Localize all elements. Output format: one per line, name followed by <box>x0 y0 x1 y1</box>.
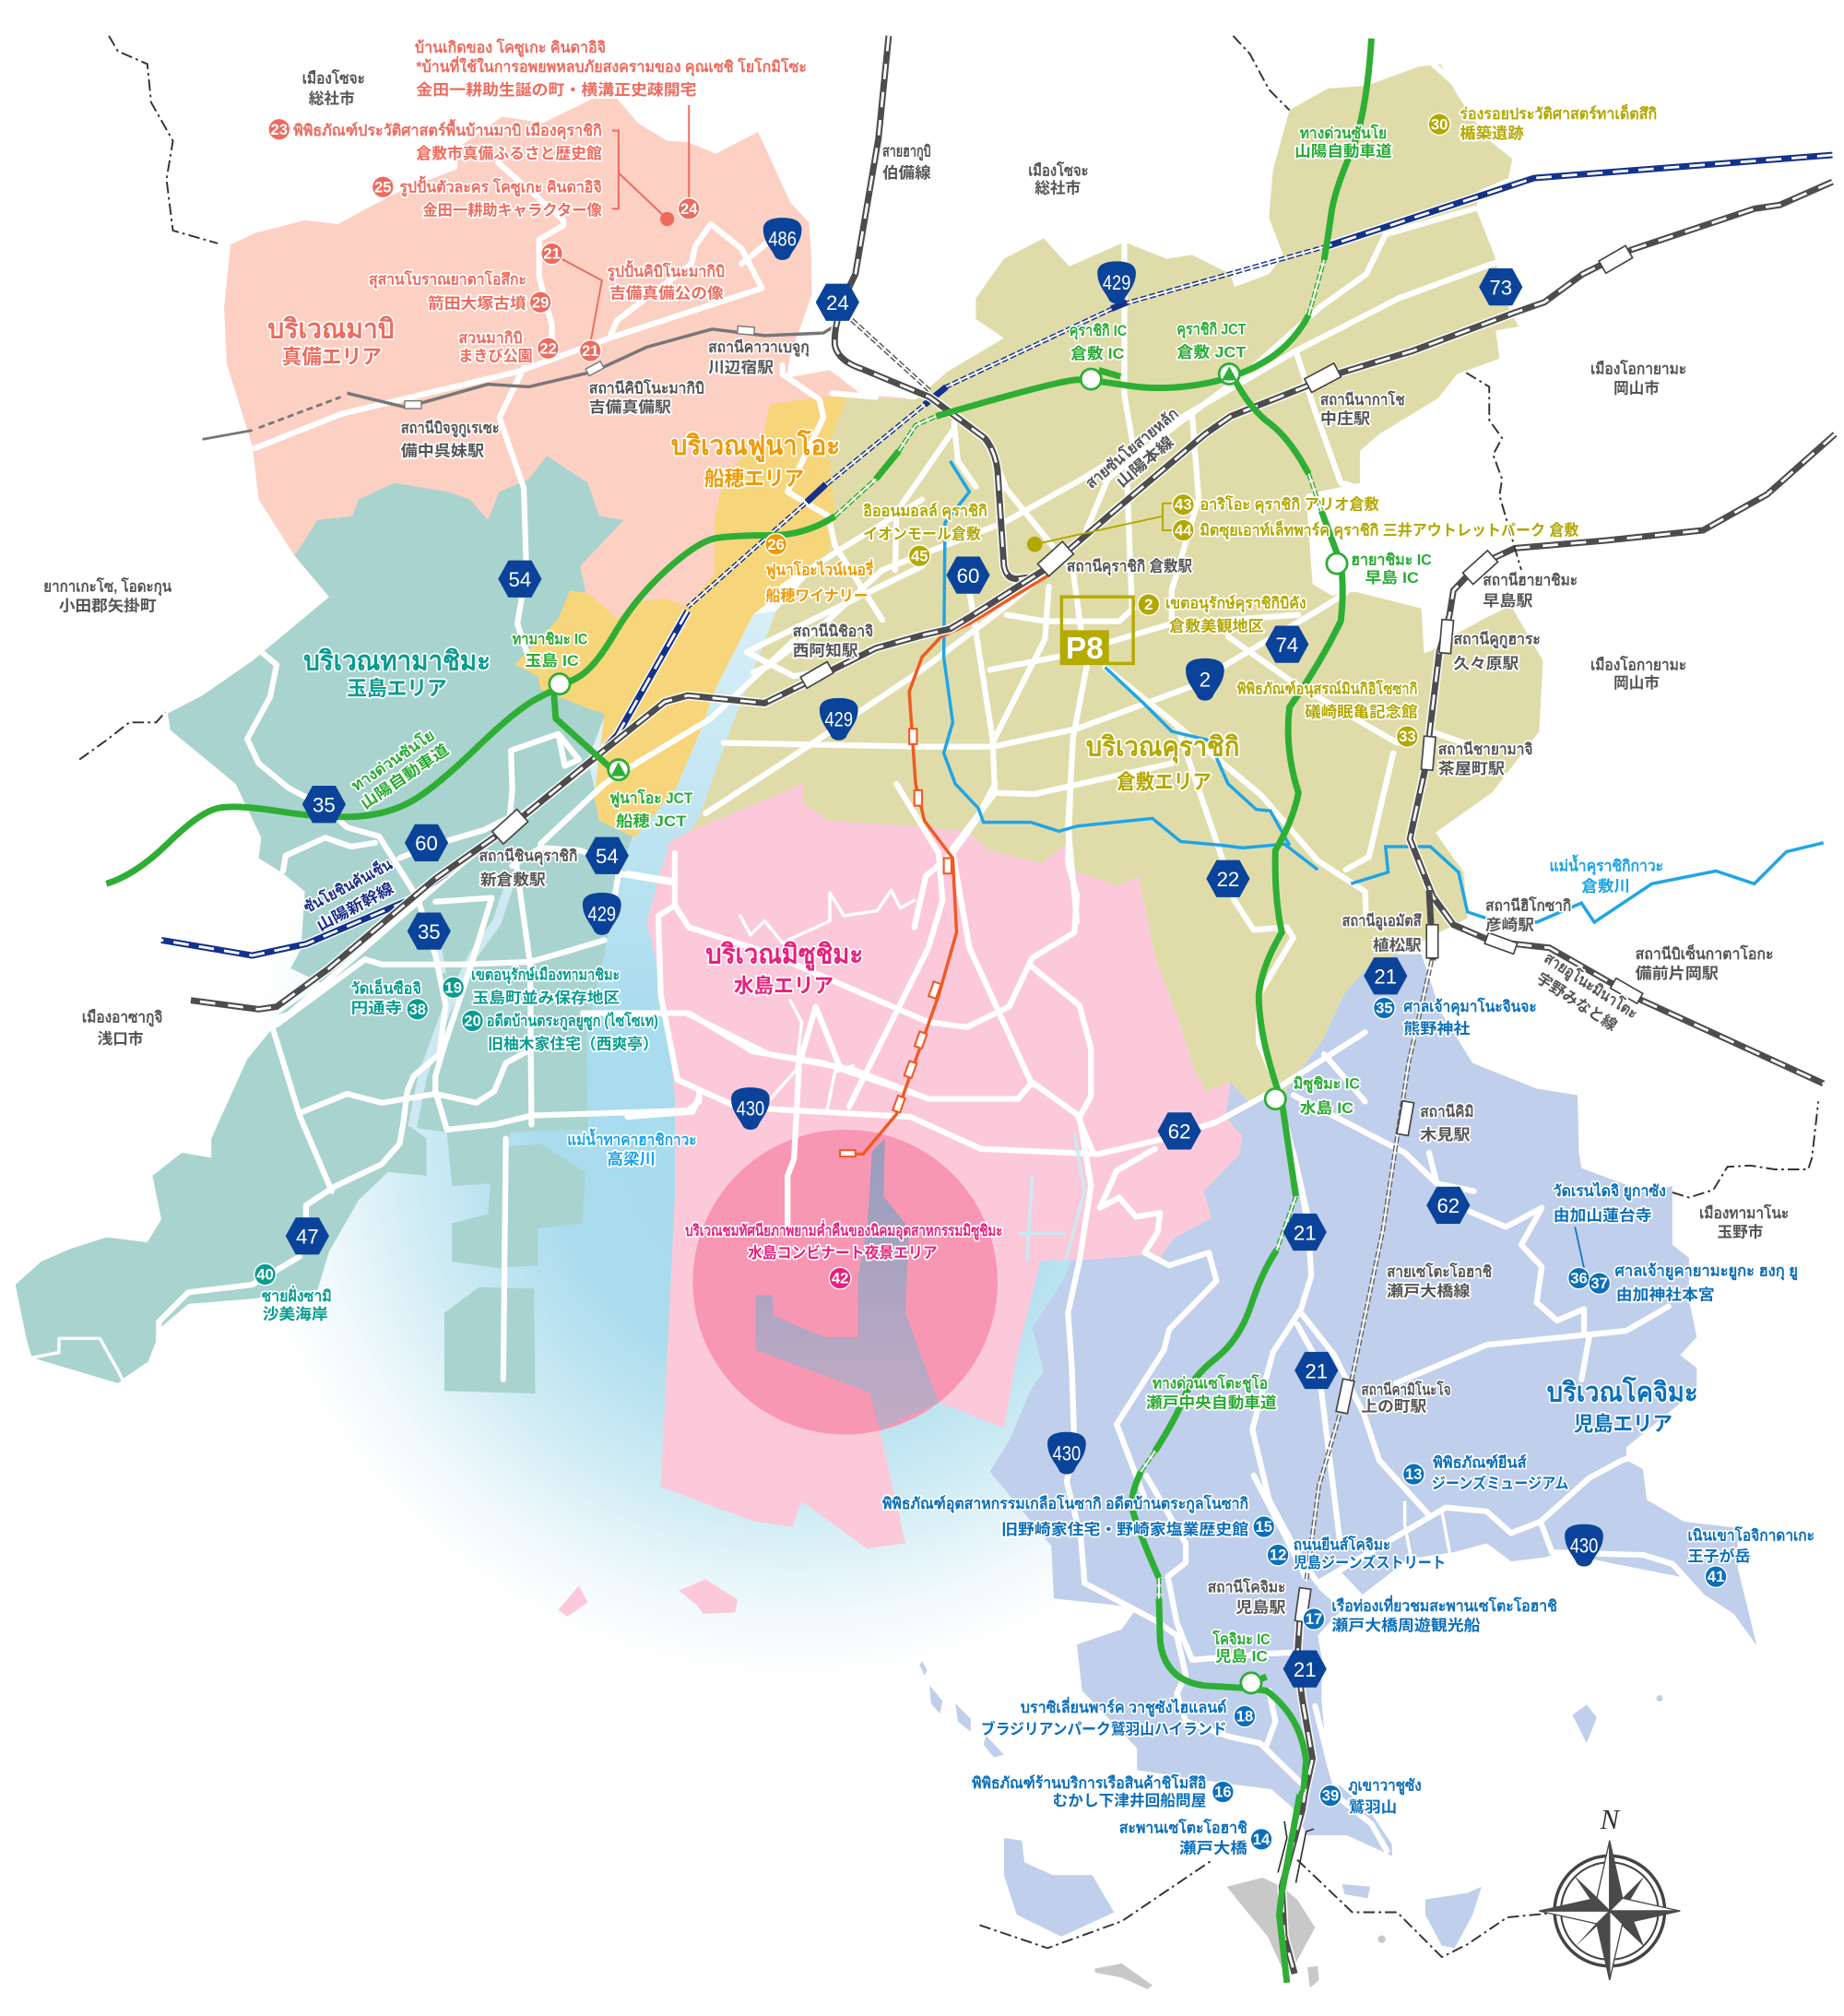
marker numbers: 30 <box>1431 115 1448 133</box>
marker numbers: 45 <box>911 547 928 564</box>
marker numbers: 13 <box>1405 1465 1423 1483</box>
heading: Kurashiki: 倉敷エリア <box>1117 770 1212 794</box>
route hex: 22 <box>1206 860 1250 897</box>
region: Mabi <box>224 99 908 619</box>
text: Yata Otsuka tomb: 箭田大塚古墳 <box>428 294 526 313</box>
route shield: 429 <box>1097 261 1136 303</box>
labels: stations and lines: 木見駅 <box>1420 1126 1471 1144</box>
labels: expressway: 早島 IC <box>1365 569 1419 587</box>
labels: expressway: 山陽自動車道 <box>1294 141 1392 160</box>
marker numbers: 2 <box>1144 596 1152 613</box>
labels: stations and lines: สถานีบิเซ็นกาตาโอกะ <box>1636 943 1774 963</box>
compass rose <box>1539 1804 1680 1980</box>
labels: stations and lines: สถานีนิชิอาจิ <box>793 623 873 640</box>
labels: expressway: ทางด่วนเซโตะชูโอ <box>1152 1373 1268 1393</box>
labels: expressway: 児島 IC <box>1215 1647 1268 1665</box>
text: night view area <box>685 1219 1002 1262</box>
labels: expressway: 山陽自動車道 <box>357 740 453 812</box>
labels: rivers: แม่น้ำทาคาฮาชิกาวะ <box>567 1129 697 1149</box>
labels: Kojima spots: むかし下津井回船問屋 <box>1053 1792 1206 1809</box>
marker numbers: 14 <box>1253 1831 1271 1848</box>
labels: stations and lines: สถานีฮิโกซากิ <box>1485 895 1571 914</box>
labels: stations and lines: สถานีคิมิ <box>1420 1103 1474 1121</box>
heading: Funao <box>671 429 840 490</box>
text: 23 museum: พิพิธภัณฑ์ประวัติศาสตร์พื้นบ้านมาบิ เมืองคุราชิกิ <box>293 119 602 140</box>
labels: stations and lines: 上の町駅 <box>1361 1397 1427 1415</box>
labels: Kurashiki spots: เขตอนุรักษ์คุราชิกิบิคัง <box>1165 595 1306 613</box>
labels: Kojima spots: 王子が岳 <box>1688 1547 1751 1565</box>
text: Funao winery: ฟูนาโอะไวน์เนอรี่ <box>766 559 873 581</box>
labels: Kurashiki spots: อิออนมอลล์ คุราชิกิ <box>863 503 987 521</box>
labels: stations and lines: สถานีคาวาเบจูกุ <box>708 338 810 358</box>
route hex: 54 north: 54 <box>509 568 531 591</box>
route hex: 35 south <box>408 913 451 950</box>
marker numbers: 44 <box>1175 522 1192 540</box>
labels: stations and lines: 西阿知駅 <box>793 642 858 659</box>
marker numbers: 33 <box>1399 728 1416 745</box>
heading: Kojima: บริเวณโคจิมะ <box>1547 1375 1698 1407</box>
number markers <box>254 113 1727 1850</box>
heading: Tamashima <box>303 646 491 700</box>
label: Shinkansen: ซันโยชินคันเซ็น <box>300 853 396 917</box>
labels: municipalities: 総社市 <box>1034 179 1081 197</box>
labels: Tamashima spots: 円通寺 <box>351 1000 402 1017</box>
route hex: 21 lower <box>1294 1352 1338 1389</box>
marker numbers: 29 <box>532 293 549 311</box>
expressway underground dashed sections <box>835 260 1324 1795</box>
heading: Kurashiki <box>1086 732 1239 794</box>
labels: stations and lines: สถานีอูเอมัตสึ <box>1342 912 1423 931</box>
text: Yata Otsuka tomb <box>369 269 526 313</box>
labels: stations and lines: 瀬戸大橋線 <box>1387 1282 1471 1299</box>
labels: Kojima spots: ภูเขาวาชูซัง <box>1348 1777 1422 1797</box>
labels: stations and lines: 児島駅 <box>1235 1599 1286 1617</box>
labels: Kurashiki spots: มิตซุยเอาท์เล็ทพาร์ค คุราชิกิ 三井アウトレットパーク 倉敷 <box>1200 520 1579 540</box>
route shield: 486: 486 <box>768 228 797 251</box>
text: Kibi statue: 吉備真備公の像 <box>609 285 724 302</box>
labels: stations and lines: สถานีคิบิโนะมากิบิ <box>589 378 704 397</box>
route shield: 430 west: 430 <box>737 1097 764 1121</box>
Ibara line double dashed <box>845 314 929 391</box>
labels: stations and lines: สถานีนากาโช <box>1320 390 1405 409</box>
labels: Kojima spots: พิพิธภัณฑ์ร้านบริการเรือสินค้าชิโมสึอิ <box>972 1773 1206 1792</box>
marker numbers: 21 <box>543 245 561 263</box>
labels: Kojima spots: 熊野神社 <box>1403 1020 1471 1038</box>
labels: municipalities: 岡山市 <box>1614 378 1660 397</box>
labels: Tamashima spots: วัดเอ็นซือจิ <box>351 978 421 998</box>
region: Mizushima <box>559 784 1242 1617</box>
text: 25 statue <box>399 175 602 219</box>
labels: stations and lines: 備前片岡駅 <box>1636 965 1719 982</box>
text: 23 museum <box>293 119 602 162</box>
route shield: 429: 429 <box>1103 271 1130 294</box>
route hex: 35 south: 35 <box>418 920 441 943</box>
route hex: 21 south <box>1283 1650 1327 1688</box>
route shield: 430 east <box>1565 1524 1603 1567</box>
route hex: 22: 22 <box>1217 868 1239 891</box>
labels: expressway: ฮายาชิมะ IC <box>1351 551 1432 568</box>
text: Makibi park <box>458 329 533 365</box>
labels: stations and lines: 茶屋町駅 <box>1438 759 1505 777</box>
labels: municipalities: 総社市 <box>309 89 355 107</box>
heading: Mabi: บริเวณมาบิ <box>267 315 395 345</box>
labels: Tamashima spots: อดีตบ้านตระกูลยูซูก (ไซโซเท) <box>487 1011 658 1031</box>
text: night view area: บริเวณชมทัศนียภาพยามค่ำคืนของนิคมอุตสาหกรรมมิซูชิมะ <box>685 1219 1002 1241</box>
labels: Kojima spots: ถนนยีนส์โคจิมะ <box>1294 1535 1390 1553</box>
labels: municipalities: เมืองอาซากูจิ <box>82 1008 162 1027</box>
labels: Kojima spots: เนินเขาโอจิกาดาเกะ <box>1688 1526 1814 1545</box>
labels: expressway: โคจิมะ IC <box>1212 1630 1271 1648</box>
route shield: 429 west <box>583 893 621 935</box>
labels: stations and lines: 伯備線 <box>882 164 931 182</box>
text: Kibi statue <box>607 260 725 302</box>
marker numbers: 12 <box>1270 1547 1286 1564</box>
route hex: 62 west: 62 <box>1168 1121 1191 1144</box>
labels: stations and lines: 彦崎駅 <box>1485 916 1534 933</box>
text: Kindaichi birthplace: 金田一耕助生誕の町・横溝正史疎開宅 <box>416 80 697 99</box>
labels: expressway: 倉敷 JCT <box>1176 342 1246 361</box>
route hex: 60 east <box>946 556 990 594</box>
labels: Kurashiki spots: 倉敷美観地区 <box>1169 617 1264 635</box>
route hex: 74 <box>1265 625 1308 663</box>
labels: expressway: มิซูชิมะ IC <box>1294 1074 1360 1094</box>
route shield: 429 west: 429 <box>588 903 616 926</box>
labels: stations and lines: 久々原駅 <box>1453 655 1519 672</box>
heading: Tamashima: 玉島エリア <box>347 677 447 700</box>
route hex: 54 south <box>585 837 629 874</box>
route hex: 21 north: 21 <box>1374 966 1397 989</box>
river: Takahashi <box>586 611 776 1153</box>
route hex: 54 north <box>498 561 542 598</box>
route hex: 21 lower: 21 <box>1305 1359 1328 1382</box>
route hex: 24: 24 <box>826 291 849 314</box>
labels: municipalities: เมืองโอกายามะ <box>1590 655 1686 673</box>
labels: Tamashima spots: เขตอนุรักษ์เมืองทามาชิมะ <box>471 966 620 984</box>
route hex: 54 south: 54 <box>596 845 619 868</box>
labels: municipalities: 玉野市 <box>1717 1223 1763 1241</box>
labels: Kurashiki spots: イオンモール倉敷 <box>863 525 981 543</box>
compass rose: N <box>1600 1804 1621 1835</box>
coastal pale lines <box>1018 1133 1084 1261</box>
labels: municipalities: 岡山市 <box>1614 673 1660 692</box>
labels: Tamashima spots <box>261 966 658 1322</box>
labels: stations and lines: 中庄駅 <box>1320 410 1370 428</box>
region: Funao <box>514 397 846 837</box>
labels: rivers: แม่น้ำคุราชิกิกาวะ <box>1550 854 1663 875</box>
labels: Tamashima spots: 玉島町並み保存地区 <box>473 988 621 1006</box>
heading: Kurashiki: บริเวณคุราชิกิ <box>1086 732 1239 763</box>
labels: stations and lines: 早島駅 <box>1483 592 1533 610</box>
label: Shinkansen: 山陽新幹線 <box>313 879 396 934</box>
region: Tamashima <box>16 456 632 1393</box>
route shield: 429 center <box>820 698 858 741</box>
labels: Kojima spots: 瀬戸大橋周遊観光船 <box>1331 1616 1481 1634</box>
route hex: 35 north: 35 <box>313 794 336 817</box>
heading: Mabi <box>267 315 395 368</box>
route hex: 47 <box>286 1217 329 1254</box>
P8 page marker: P8 <box>1066 632 1104 666</box>
water channel <box>755 1139 939 1429</box>
route hex: 24 <box>816 284 859 321</box>
route hex: 35 north <box>302 786 346 823</box>
bridge markers <box>1278 1821 1314 1883</box>
route hex: 73 <box>1479 268 1522 305</box>
labels: expressway: ทางด่วนซันโย <box>1300 124 1387 142</box>
labels: Kojima spots: 由加神社本宮 <box>1616 1287 1715 1304</box>
labels: Kojima spots: 旧野崎家住宅・野崎家塩業歴史館 <box>1001 1520 1248 1538</box>
labels: Kurashiki spots: อาริโอะ คุราชิกิ アリオ倉敷 <box>1200 495 1379 515</box>
route hex: 21 south: 21 <box>1294 1658 1317 1681</box>
labels: expressway: คุราชิกิ JCT <box>1176 320 1246 338</box>
marker numbers: 18 <box>1236 1708 1253 1725</box>
heading: Kojima: 児島エリア <box>1574 1412 1673 1435</box>
labels: Tamashima spots: 沙美海岸 <box>263 1304 328 1322</box>
labels: Kojima spots: พิพิธภัณฑ์อุตสาหกรรมเกลือโนซากิ อดีตบ้านตระกูลโนซากิ <box>882 1494 1248 1514</box>
labels: stations and lines: สถานีคามิโนะโจ <box>1361 1380 1451 1398</box>
labels: Kojima spots: 児島ジーンズストリート <box>1294 1553 1446 1571</box>
route hex: 47: 47 <box>296 1226 319 1249</box>
route hex: 74: 74 <box>1275 634 1298 657</box>
P8 page marker <box>1061 597 1133 666</box>
Mizushima Rinkai railway <box>840 575 1048 1156</box>
labels: Kojima spots: ศาลเจ้าคุมาโนะจินจะ <box>1403 997 1537 1016</box>
labels: Kojima spots: ブラジリアンパーク鷲羽山ハイランド <box>981 1719 1227 1737</box>
labels: stations and lines: สายซันโยสายหลัก <box>1082 404 1182 492</box>
text: Funao winery <box>766 559 873 604</box>
labels: expressway: คุราชิกิ IC <box>1070 322 1127 340</box>
route shield: 2: 2 <box>1200 668 1211 691</box>
Shinkansen <box>161 155 1832 955</box>
connector: Ario and Outlet <box>1027 504 1175 552</box>
labels: stations and lines: สถานีชายามาจิ <box>1438 741 1532 758</box>
labels: stations and lines: สถานีคุราชิกิ 倉敷駅 <box>1067 556 1192 575</box>
text: 23 museum: 倉敷市真備ふるさと歴史館 <box>416 144 602 162</box>
labels: municipalities: เมืองโซจะ <box>1028 160 1089 179</box>
labels: stations and lines: สถานีชินคุราชิกิ <box>479 847 577 865</box>
labels: stations and lines: 備中呉妹駅 <box>401 442 484 459</box>
labels: stations and lines: 新倉敷駅 <box>480 871 546 889</box>
route hex: 62 east: 62 <box>1436 1194 1460 1217</box>
text: Yata Otsuka tomb: สุสานโบราณยาตาโอสึกะ <box>369 269 526 289</box>
marker numbers: 43 <box>1175 496 1192 514</box>
labels: expressway: 水島 IC <box>1300 1099 1353 1117</box>
marker numbers: 23 <box>271 121 288 138</box>
marker numbers: 19 <box>444 978 462 996</box>
labels: Kojima spots: เรือท่องเที่ยวชมสะพานเซโตะโอฮาชิ <box>1331 1595 1557 1615</box>
labels: stations and lines: 川辺宿駅 <box>708 358 774 376</box>
labels: stations and lines: สถานีคูกูฮาระ <box>1453 631 1541 650</box>
text: Makibi park: まきび公園 <box>458 348 533 365</box>
marker numbers: 24 <box>680 200 698 218</box>
marker numbers: 41 <box>1708 1568 1724 1585</box>
marker numbers: 39 <box>1322 1787 1339 1805</box>
labels: stations and lines: สถานีฮายาชิมะ <box>1483 572 1578 589</box>
labels: Kurashiki spots: 礒崎眠亀記念館 <box>1305 703 1417 721</box>
marker numbers: 37 <box>1590 1275 1608 1292</box>
labels: stations and lines <box>401 142 1774 1617</box>
labels: municipalities: เมืองโซจะ <box>302 68 365 87</box>
labels: Kojima spots: 鷲羽山 <box>1348 1797 1397 1816</box>
labels: stations and lines: สถานีโคจิมะ <box>1208 1577 1285 1595</box>
text: Funao winery: 船穂ワイナリー <box>766 587 869 604</box>
heading: Mizushima <box>705 940 863 997</box>
route hex: 60 west: 60 <box>415 832 438 855</box>
marker numbers: 15 <box>1256 1518 1272 1536</box>
labels: Kurashiki spots: พิพิธภัณฑ์อนุสรณ์มินกิอิโซซากิ <box>1237 680 1417 699</box>
text: Makibi park: สวนมากิบิ <box>458 329 523 347</box>
route hex: 62 west <box>1158 1112 1201 1149</box>
labels: expressway: ทางด่วนซันโย <box>348 726 438 795</box>
labels: stations and lines: 山陽本線 <box>1113 433 1177 491</box>
labels: rivers: 倉敷川 <box>1581 877 1630 895</box>
heading: Funao: 船穂エリア <box>704 467 804 490</box>
labels: Tamashima spots: ชายฝั่งซามิ <box>261 1285 332 1305</box>
route hex: 60 west <box>405 824 448 861</box>
labels: expressway: ทามาชิมะ IC <box>513 631 588 648</box>
labels: Kojima spots: บราซิเลี่ยนพาร์ค วาชูซังไฮแลนด์ <box>1021 1696 1227 1718</box>
Mabi label connectors <box>552 105 689 343</box>
labels: expressway <box>348 124 1432 1665</box>
labels: rivers: 高梁川 <box>607 1149 656 1168</box>
route shield: 430 south <box>1047 1432 1086 1475</box>
labels: municipalities <box>43 68 1789 1241</box>
labels: stations and lines: สายอูโนะมินาโตะ <box>1540 948 1641 1024</box>
labels: stations and lines: 宇野みなと線 <box>1533 969 1621 1035</box>
heading: Funao: บริเวณฟูนาโอะ <box>671 429 840 462</box>
heading: Mizushima: บริเวณมิซูชิมะ <box>705 940 863 970</box>
route shield: 430 south: 430 <box>1053 1441 1081 1465</box>
river: Kurashiki and tributaries <box>944 461 1824 922</box>
labels: stations and lines: 植松駅 <box>1373 937 1422 955</box>
interchange markers <box>550 363 1347 1693</box>
labels: Kojima spots: 由加山蓮台寺 <box>1554 1206 1652 1225</box>
marker numbers: 17 <box>1306 1610 1322 1628</box>
labels: municipalities: เมืองโอกายามะ <box>1590 360 1686 378</box>
labels: rivers <box>567 854 1663 1168</box>
expressways <box>106 39 1371 1983</box>
labels: Kurashiki spots: ร่องรอยประวัติศาสตร์ทาเด็ตสึกิ <box>1460 103 1657 123</box>
route hex: 62 east <box>1426 1187 1470 1224</box>
marker numbers: 40 <box>256 1265 274 1283</box>
marker numbers: 22 <box>539 339 557 357</box>
marker numbers: 20 <box>464 1012 481 1029</box>
pale river in Tamashima <box>412 883 510 1127</box>
labels: Kojima spots: ศาลเจ้ายูคายามะยูกะ ฮงกุ ยู <box>1614 1262 1798 1281</box>
text: Kibi statue: รูปปั้นคิบิโนะมากิบิ <box>607 260 725 282</box>
labels: expressway: ฟูนาโอะ JCT <box>609 789 692 809</box>
marker numbers: 26 <box>767 536 785 553</box>
route shield: 429 center: 429 <box>824 707 853 730</box>
marker numbers: 35 <box>1376 1000 1393 1017</box>
labels: municipalities: 小田郡矢掛町 <box>59 596 157 614</box>
labels: expressway: 玉島 IC <box>525 652 579 670</box>
labels: Kurashiki spots: 楯築遺跡 <box>1460 124 1524 142</box>
station markers <box>492 245 1643 1622</box>
route hex: 73: 73 <box>1489 276 1512 299</box>
marker numbers: 16 <box>1214 1784 1232 1801</box>
island: gray <box>1094 1878 1386 1989</box>
heading: Kojima <box>1547 1375 1698 1435</box>
text: Kindaichi birthplace <box>415 38 807 99</box>
text: night view area: 水島コンビナート夜景エリア <box>748 1243 938 1262</box>
marker numbers: 38 <box>409 1001 426 1018</box>
labels: Kojima spots <box>882 997 1814 1857</box>
route hex: 60 east: 60 <box>957 564 979 587</box>
labels: Kojima spots: สะพานเซโตะโอฮาชิ <box>1119 1818 1247 1836</box>
route hex: 21 mid <box>1283 1214 1327 1251</box>
labels: Tamashima spots: 旧柚木家住宅（西爽亭） <box>488 1034 658 1052</box>
labels: Kojima spots: วัดเรนไดจิ ยูกาซัง <box>1554 1181 1666 1202</box>
labels: Kojima spots: ジーンズミュージアム <box>1432 1474 1568 1492</box>
text: Kindaichi birthplace: บ้านเกิดของ โคซูเกะ คินดาอิจิ <box>415 38 606 58</box>
route hex: 21 north <box>1364 957 1407 994</box>
marker numbers: 25 <box>374 178 392 196</box>
labels: Kurashiki spots <box>863 103 1657 721</box>
labels: stations and lines: สถานีบิจจูกูเรเซะ <box>401 419 500 438</box>
labels: expressway: 船穂 JCT <box>616 812 686 830</box>
text: Kindaichi birthplace: *บ้านที่ใช้ในการอพยพหลบภัยสงครามของ คุณเซชิ โยโกมิโซะ <box>416 55 807 77</box>
Kibi line <box>202 323 840 439</box>
labels: Kojima spots: พิพิธภัณฑ์ยีนส์ <box>1433 1454 1527 1472</box>
labels: municipalities: ยากาเกะโซ, โอดะกุน <box>43 577 172 597</box>
text: 25 statue: 金田一耕助キャラクター像 <box>422 200 602 219</box>
labels: municipalities: 浅口市 <box>98 1029 144 1048</box>
labels: expressway: 倉敷 IC <box>1070 344 1124 362</box>
marker numbers <box>256 115 1724 1848</box>
route shield: 430 west <box>731 1087 770 1130</box>
heading: Mizushima: 水島エリア <box>734 974 833 997</box>
route hex: 21 mid: 21 <box>1294 1221 1317 1244</box>
marker numbers: 42 <box>832 1270 848 1287</box>
labels: stations and lines: สายฮากูบิ <box>882 142 931 161</box>
route shield: 486 <box>763 218 801 260</box>
heading: Mabi: 真備エリア <box>282 345 382 368</box>
marker numbers: 21 <box>582 342 599 360</box>
connector: Yugasan <box>1575 1227 1584 1268</box>
text: 25 statue: รูปปั้นตัวละคร โคซูเกะ คินดาอิจิ <box>399 175 602 197</box>
heading: Tamashima: บริเวณทามาชิมะ <box>303 646 491 676</box>
region: Kojima <box>919 955 1757 1948</box>
route shield: 430 east: 430 <box>1570 1534 1598 1557</box>
region: Kurashiki <box>689 64 1543 1101</box>
labels: Kojima spots: 瀬戸大橋 <box>1179 1840 1247 1857</box>
labels: municipalities: เมืองทามาโนะ <box>1699 1204 1789 1222</box>
route shield: 2 <box>1186 658 1224 701</box>
labels: stations and lines: 吉備真備駅 <box>589 398 671 416</box>
marker numbers: 36 <box>1570 1270 1588 1287</box>
area circle: night view <box>692 1130 998 1434</box>
labels: expressway: 瀬戸中央自動車道 <box>1146 1393 1277 1411</box>
labels: stations and lines: สายเซโตะโอฮาชิ <box>1387 1263 1492 1281</box>
